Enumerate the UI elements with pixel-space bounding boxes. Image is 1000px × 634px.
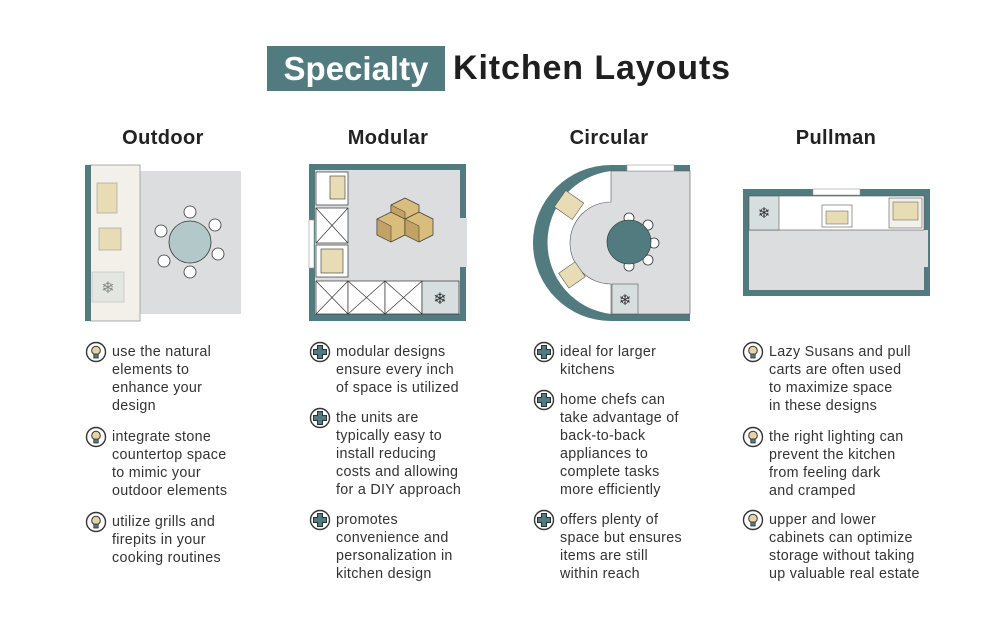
bullet 3: cooking routines	[112, 550, 221, 566]
bullet 1: use the natural	[112, 344, 211, 360]
bullet 3: convenience and	[336, 530, 449, 546]
bullet 2: costs and allowing	[336, 464, 458, 480]
bullet 3	[769, 512, 920, 582]
bullet 3: upper and lower	[769, 512, 876, 528]
bullet 1: elements to	[112, 362, 189, 378]
bullet 1: in these designs	[769, 398, 877, 414]
bullet 2: to mimic your	[112, 465, 201, 481]
bullet 1	[560, 344, 656, 378]
bullet 1: ideal for larger	[560, 344, 656, 360]
bullet 1	[336, 344, 459, 396]
bullet 3: utilize grills and	[112, 514, 215, 530]
bullet 3: within reach	[560, 566, 640, 582]
bullet 1: of space is utilized	[336, 380, 459, 396]
title	[267, 46, 731, 91]
bullet 2	[769, 429, 904, 499]
bullet 2: home chefs can	[560, 392, 665, 408]
bullet 3	[336, 512, 453, 582]
bullet 2	[112, 429, 227, 499]
bullet 2: appliances to	[560, 446, 648, 462]
bullet 2: complete tasks	[560, 464, 660, 480]
bullet 3: items are still	[560, 548, 648, 564]
bullet 1: carts are often used	[769, 362, 901, 378]
bullet 1: Lazy Susans and pull	[769, 344, 911, 360]
bullets: pullman	[769, 344, 920, 582]
icons	[86, 342, 106, 362]
title highlight: Specialty	[267, 46, 445, 91]
bullet 2: the right lighting can	[769, 429, 904, 445]
bullet 2: for a DIY approach	[336, 482, 461, 498]
bullet 3: offers plenty of	[560, 512, 658, 528]
bullet 2: the units are	[336, 410, 419, 426]
bullet 2	[560, 392, 679, 498]
heading: Outdoor: Outdoor	[122, 127, 204, 149]
bullet 1: to maximize space	[769, 380, 892, 396]
plan: circular: ❄	[619, 292, 631, 309]
plan: circular	[533, 165, 690, 321]
bullet 2: take advantage of	[560, 410, 679, 426]
plan: outdoor: ❄	[101, 280, 115, 297]
bullet 2: from feeling dark	[769, 465, 881, 481]
bullet 3: up valuable real estate	[769, 566, 920, 582]
heading: Pullman: Pullman	[796, 127, 876, 149]
plan: pullman	[743, 189, 930, 296]
bullet 3: kitchen design	[336, 566, 432, 582]
bullet 3	[560, 512, 682, 582]
bullet 2: and cramped	[769, 483, 856, 499]
title text: Kitchen Layouts	[453, 49, 731, 87]
bullet 1: ensure every inch	[336, 362, 454, 378]
bullet 2: back-to-back	[560, 428, 645, 444]
bullets: outdoor	[112, 344, 227, 566]
plan: pullman: ❄	[758, 205, 770, 222]
plan: outdoor	[85, 165, 241, 321]
bullet 1: modular designs	[336, 344, 445, 360]
bullet 3: personalization in	[336, 548, 453, 564]
title highlight: Specialty: Specialty	[284, 50, 428, 87]
bullet 1: kitchens	[560, 362, 615, 378]
bullet 3: firepits in your	[112, 532, 206, 548]
plan: modular	[309, 164, 467, 321]
bullet 2: integrate stone	[112, 429, 211, 445]
heading: Circular: Circular	[570, 127, 648, 149]
bullet 1: enhance your	[112, 380, 202, 396]
bullets: circular	[560, 344, 682, 582]
bullet 3	[112, 514, 221, 566]
bullet 2: typically easy to	[336, 428, 442, 444]
heading: Modular: Modular	[348, 127, 428, 149]
bullet 2: outdoor elements	[112, 483, 227, 499]
bullet 2: more efficiently	[560, 482, 661, 498]
bullet 3: space but ensures	[560, 530, 682, 546]
bullets: modular	[336, 344, 461, 582]
bullet 1: design	[112, 398, 156, 414]
bullet 3: promotes	[336, 512, 398, 528]
bullet 1	[769, 344, 911, 414]
bullet 2	[336, 410, 461, 498]
bullet 2: prevent the kitchen	[769, 447, 896, 463]
bullet 1	[112, 344, 211, 414]
bullet 2: countertop space	[112, 447, 226, 463]
bullet 2: install reducing	[336, 446, 436, 462]
plan: modular: ❄	[433, 291, 447, 308]
bullet 3: cabinets can optimize	[769, 530, 913, 546]
bullet 3: storage without taking	[769, 548, 915, 564]
